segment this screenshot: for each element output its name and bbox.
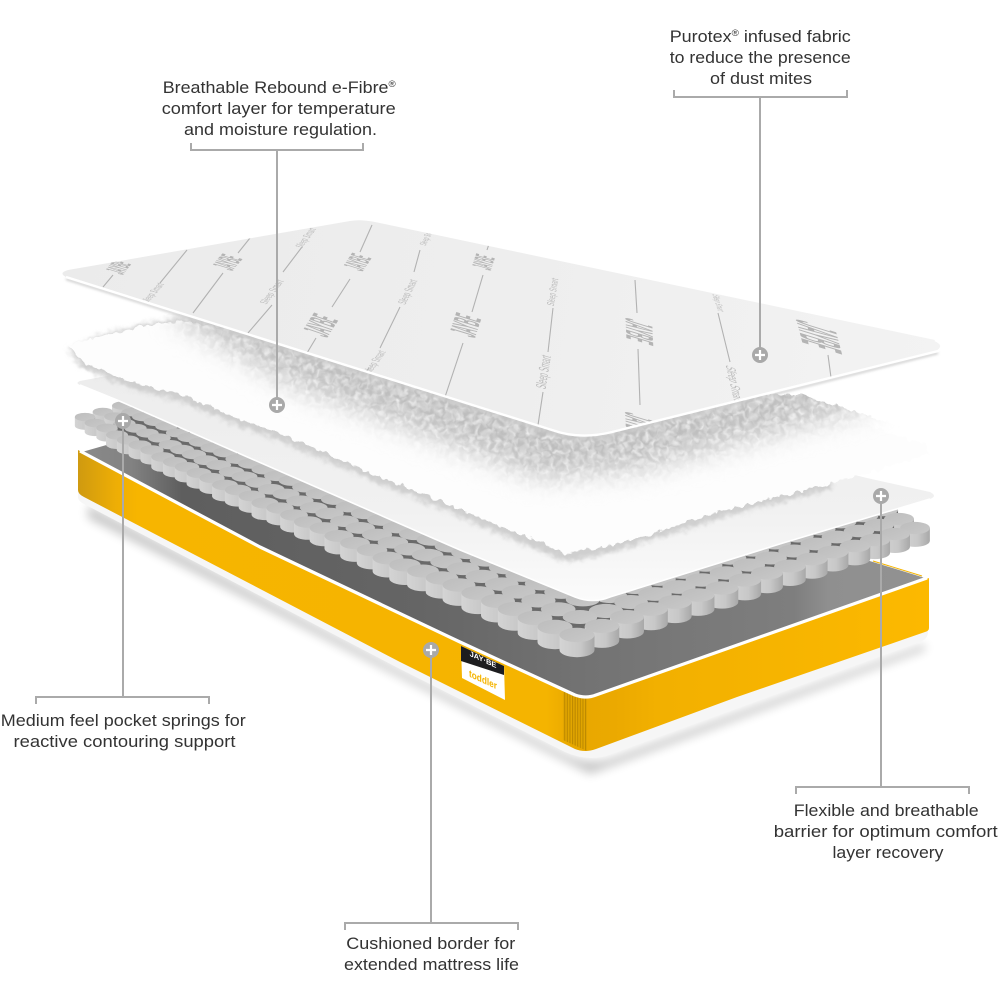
Sleep Smart marks: Sleep Smart xyxy=(722,363,745,405)
Sleep Smart marks: Sleep Smart xyxy=(710,293,727,313)
Sleep Smart marks: Sleep Smart xyxy=(257,278,286,305)
back rows with shaded sides xyxy=(93,397,914,639)
JAYBE marks: JAYBE xyxy=(339,251,378,274)
marker xyxy=(115,413,131,429)
base mattress xyxy=(78,400,929,774)
callout: pocket springs xyxy=(1,413,250,751)
JAYBE marks: JAYBE xyxy=(295,310,346,341)
caption: Cushioned border for xyxy=(346,935,516,953)
pocket springs xyxy=(75,397,930,657)
marker xyxy=(423,642,439,658)
mattress label xyxy=(461,646,505,700)
marker xyxy=(873,488,889,504)
JAYBE marks: JAYBE xyxy=(782,314,853,358)
Sleep Smart marks: Sleep Smart xyxy=(534,353,555,391)
marker xyxy=(752,347,768,363)
e-fibre comfort layer xyxy=(67,314,874,564)
corner crease stitching xyxy=(563,689,587,751)
caption: Breathable Rebound e-Fibre xyxy=(163,79,396,97)
yellow border band xyxy=(78,450,929,751)
caption: ® xyxy=(732,28,739,38)
pattern lines xyxy=(103,225,832,425)
JAYBE marks xyxy=(106,252,842,427)
fabric top sheet xyxy=(62,220,941,443)
leader line xyxy=(674,90,847,355)
marker xyxy=(269,397,285,413)
caption: infused fabric xyxy=(739,28,851,46)
Sleep Smart marks: Sleep Smart xyxy=(545,276,561,307)
callout: flexible barrier xyxy=(774,488,1000,862)
leader line xyxy=(191,143,363,405)
caption: Medium feel pocket springs for xyxy=(1,712,246,730)
barrier sheet xyxy=(78,340,934,600)
fibre shadow under top sheet xyxy=(170,300,880,478)
JAYBE marks: JAYBE xyxy=(616,314,660,348)
callout: fabric xyxy=(670,28,855,363)
Sleep Smart marks: Sleep Smart xyxy=(293,226,319,249)
Sleep Smart marks: Sleep Smart xyxy=(361,349,389,375)
sheet under-shadow xyxy=(66,279,938,439)
front rows xyxy=(75,413,930,657)
Sleep Smart marks: Sleep Smart xyxy=(419,228,436,247)
sheet body xyxy=(78,340,934,600)
caption: and moisture regulation. xyxy=(184,121,377,139)
callout: comfort layer xyxy=(162,73,400,413)
caption: reactive contouring support xyxy=(14,733,236,751)
woven branding xyxy=(100,225,853,443)
leader line xyxy=(36,421,209,704)
mattress label: toddler xyxy=(469,668,497,692)
back rim xyxy=(873,561,922,576)
callout: cushioned border xyxy=(344,642,520,974)
Sleep Smart marks xyxy=(139,226,745,405)
JAYBE marks: JAYBE xyxy=(100,257,137,277)
sheet body xyxy=(62,220,941,436)
JAYBE marks: JAYBE xyxy=(468,252,502,273)
mattress label: JAY·BE xyxy=(470,649,496,670)
caption: Purotex xyxy=(670,28,851,46)
fibre edge shade xyxy=(68,319,833,562)
sheet white lip xyxy=(66,277,941,436)
Sleep Smart marks: Sleep Smart xyxy=(139,281,167,304)
caption: to reduce the presence xyxy=(670,49,851,67)
caption: comfort layer for temperature xyxy=(162,100,396,118)
white top rim xyxy=(80,451,927,697)
grey top surface xyxy=(82,400,925,697)
fibre body xyxy=(68,321,930,554)
caption: Flexible and breathable xyxy=(794,802,979,820)
caption: barrier for optimum comfort xyxy=(774,823,998,841)
Sleep Smart marks: Sleep Smart xyxy=(395,278,420,306)
floor shadow xyxy=(88,505,925,774)
JAYBE marks: JAYBE xyxy=(443,309,489,341)
JAYBE marks: JAYBE xyxy=(616,408,661,443)
lower white rim xyxy=(78,490,928,758)
leader line xyxy=(345,650,518,930)
leader line xyxy=(796,496,969,794)
JAYBE marks: JAYBE xyxy=(205,251,249,273)
caption: extended mattress life xyxy=(344,956,519,974)
caption: of dust mites xyxy=(710,70,812,88)
caption: ® xyxy=(389,79,396,89)
caption: layer recovery xyxy=(832,844,944,862)
sheet lit edge xyxy=(80,385,930,600)
